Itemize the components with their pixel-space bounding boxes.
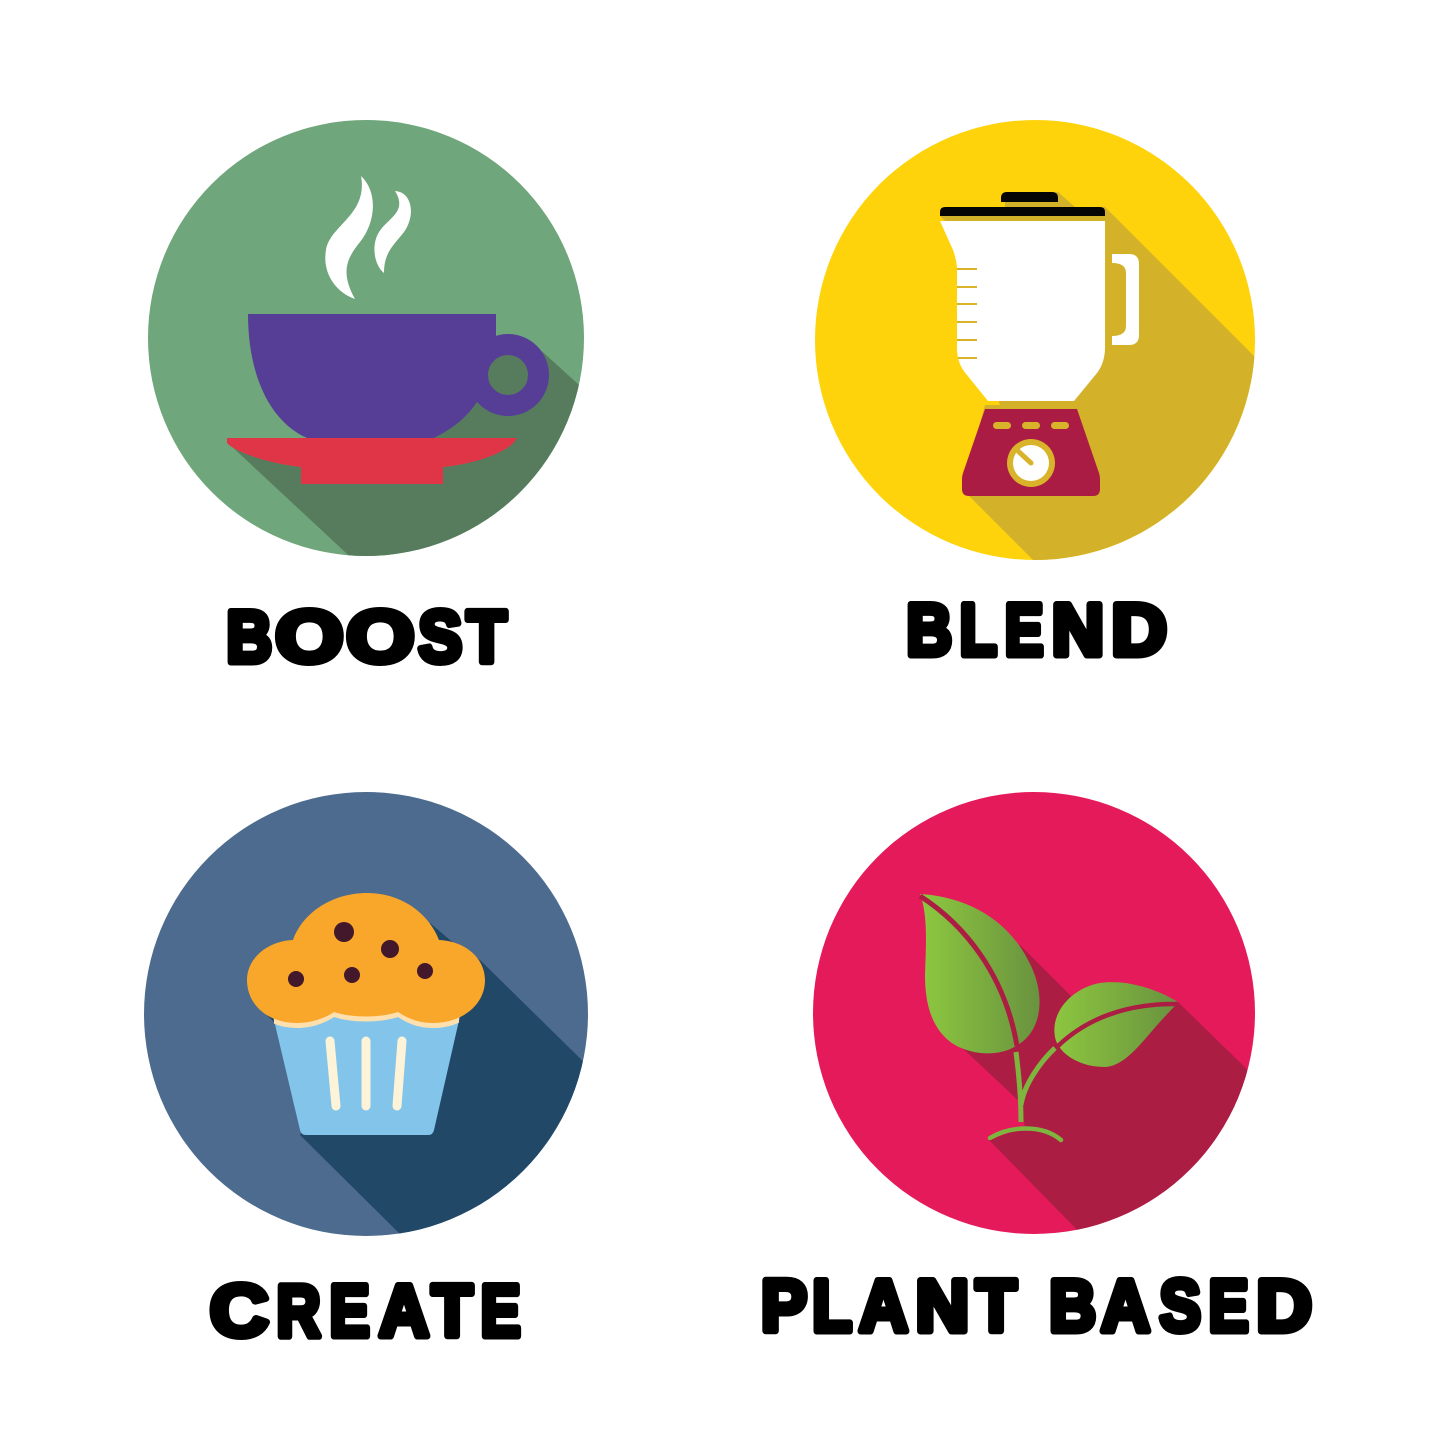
- label: plant based: D: [1256, 1266, 1312, 1347]
- label: blend: E: [1005, 590, 1044, 671]
- stem: [1016, 1048, 1055, 1122]
- label: boost: S: [418, 597, 462, 678]
- icon: coffee cup with steam: [227, 176, 538, 484]
- label: boost: B: [226, 597, 272, 678]
- label: blend: B: [906, 590, 952, 671]
- lid: [940, 207, 1105, 216]
- measuring ticks: [957, 268, 977, 359]
- label: blend: D: [1111, 590, 1167, 671]
- panel: create: [144, 792, 595, 1245]
- label: create: A: [379, 1271, 429, 1352]
- ground line: [990, 1128, 1061, 1140]
- label: plant based: L: [812, 1266, 852, 1347]
- large leaf midrib: [920, 896, 1017, 1046]
- long shadow: muffin: [262, 923, 595, 1245]
- jar handle: [1112, 254, 1139, 345]
- label: plant based: E: [1209, 1266, 1249, 1347]
- muffin top: [247, 893, 485, 1023]
- panel: plant based: [813, 792, 1260, 1245]
- chocolate chips: [288, 922, 433, 987]
- muffin wrapper: [273, 1016, 460, 1135]
- yellow circle background: [815, 120, 1255, 560]
- base: [962, 409, 1100, 496]
- small leaf midrib: [1058, 1004, 1178, 1046]
- label: blend: N: [1052, 590, 1104, 671]
- steam: [325, 176, 411, 299]
- jar: [940, 221, 1105, 401]
- label: plant based: A: [1101, 1266, 1150, 1347]
- label: create: E: [330, 1271, 370, 1352]
- cup handle: [478, 344, 538, 406]
- label: plant based: A: [859, 1266, 908, 1347]
- large leaf: [920, 894, 1040, 1053]
- small leaf: [1054, 982, 1178, 1067]
- label: boost: T: [467, 597, 506, 678]
- label: blend: L: [960, 590, 997, 671]
- label: plant based: N: [916, 1266, 969, 1347]
- long shadow: blender: [940, 192, 1265, 575]
- saucer: [227, 438, 517, 484]
- label: plant based: B: [1049, 1266, 1096, 1347]
- panel: boost: [148, 120, 600, 566]
- lid knob: [1001, 192, 1058, 202]
- label: plant based: T: [976, 1266, 1016, 1347]
- label: create: T: [432, 1271, 472, 1352]
- cream edge under muffin top: [274, 1012, 459, 1028]
- label: boost: O: [276, 597, 343, 678]
- icon: blender: [940, 192, 1139, 496]
- buttons: [993, 422, 1069, 429]
- label: create: C: [210, 1271, 268, 1352]
- green circle background: [148, 120, 584, 556]
- long shadow: plant: [963, 945, 1248, 1230]
- long shadow: cup: [233, 350, 579, 556]
- label: create: R: [276, 1271, 320, 1352]
- label: plant based: P: [761, 1266, 807, 1347]
- label: create: E: [481, 1271, 521, 1352]
- dial: [1007, 439, 1055, 487]
- cup body: [248, 314, 496, 440]
- icon: muffin: [247, 893, 485, 1135]
- icon: sprout: [920, 894, 1178, 1140]
- label: boost: O: [346, 597, 414, 678]
- label: plant based: S: [1160, 1266, 1201, 1347]
- pink circle background: [813, 792, 1255, 1234]
- wrapper stripes: [330, 1041, 402, 1106]
- blue circle background: [144, 792, 588, 1236]
- panel: blend: [815, 120, 1265, 575]
